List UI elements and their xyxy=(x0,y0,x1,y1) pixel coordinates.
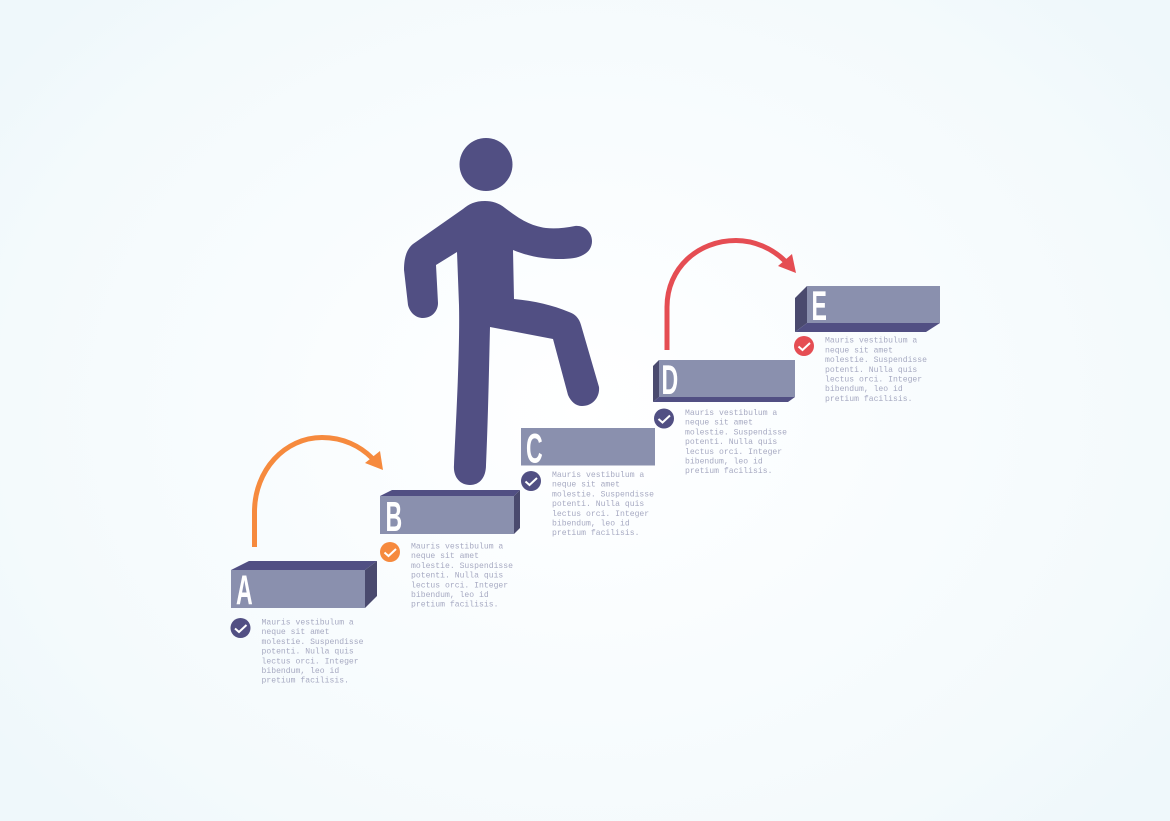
text block E: bibendum, leo id xyxy=(825,385,903,394)
text block D: molestie. Suspendisse xyxy=(685,428,787,437)
icon: check B xyxy=(380,542,400,562)
arrow: A to B xyxy=(254,438,383,547)
arrow: D to E xyxy=(667,240,796,350)
text block A: neque sit amet xyxy=(262,628,330,637)
text block D: lectus orci. Integer xyxy=(685,448,782,457)
text block D: bibendum, leo id xyxy=(685,458,763,466)
icon: check C xyxy=(521,471,541,491)
text block A: potenti. Nulla quis xyxy=(262,648,354,657)
text block C: molestie. Suspendisse xyxy=(552,490,654,499)
step A xyxy=(231,561,377,614)
text block E: pretium facilisis. xyxy=(825,395,912,404)
letter E: E xyxy=(812,283,827,330)
step D xyxy=(653,357,795,404)
text block B: molestie. Suspendisse xyxy=(411,562,513,571)
letter D: D xyxy=(662,357,678,404)
text block D: potenti. Nulla quis xyxy=(685,438,777,447)
icon: check E xyxy=(794,336,814,356)
text block A: Mauris vestibulum a xyxy=(262,618,354,628)
step E xyxy=(795,283,940,332)
text block A: pretium facilisis. xyxy=(262,677,349,686)
text block E: molestie. Suspendisse xyxy=(825,356,927,365)
icon: check D xyxy=(654,408,674,428)
text block B: neque sit amet xyxy=(411,552,479,561)
text block C: neque sit amet xyxy=(552,481,620,490)
text block A: bibendum, leo id xyxy=(262,667,339,676)
text block C: potenti. Nulla quis xyxy=(552,500,644,509)
text block B: potenti. Nulla quis xyxy=(411,572,503,581)
step C xyxy=(521,425,655,472)
text block A: lectus orci. Integer xyxy=(262,657,359,666)
text block B: bibendum, leo id xyxy=(411,591,489,600)
letter C: C xyxy=(526,425,543,472)
text block E: neque sit amet xyxy=(825,346,893,355)
text block B: lectus orci. Integer xyxy=(411,581,508,590)
text block C: lectus orci. Integer xyxy=(552,510,649,519)
text block B: pretium facilisis. xyxy=(411,601,498,610)
text block D: Mauris vestibulum a xyxy=(685,409,777,418)
figure body xyxy=(404,201,599,485)
text block C: pretium facilisis. xyxy=(552,529,639,538)
figure head xyxy=(460,138,512,191)
text block A: molestie. Suspendisse xyxy=(262,638,364,647)
text block C: bibendum, leo id xyxy=(552,520,630,528)
text block D: neque sit amet xyxy=(685,419,753,428)
step B xyxy=(380,490,520,541)
letter A: A xyxy=(236,567,253,614)
text block E: potenti. Nulla quis xyxy=(825,366,917,375)
text block B: Mauris vestibulum a xyxy=(411,542,503,552)
text block C: Mauris vestibulum a xyxy=(552,471,644,480)
figure: person climbing steps xyxy=(404,138,599,485)
icon: check A xyxy=(230,618,250,638)
letter B: B xyxy=(386,494,402,541)
text block D: pretium facilisis. xyxy=(685,467,772,476)
text block E: Mauris vestibulum a xyxy=(825,337,917,346)
text block E: lectus orci. Integer xyxy=(825,376,922,384)
